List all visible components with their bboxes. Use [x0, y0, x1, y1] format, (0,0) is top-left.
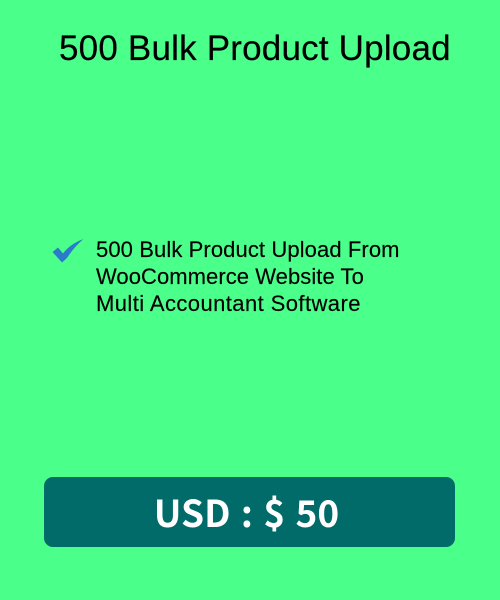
title: 500 Bulk Product Upload — [59, 29, 451, 68]
icon: check mark — [52, 239, 84, 262]
price bar: USD : $ 50 — [154, 484, 339, 538]
feature description: Multi Accountant Software — [96, 291, 361, 316]
feature description — [96, 237, 400, 316]
feature description: WooCommerce Website To — [96, 264, 364, 289]
price bar — [44, 477, 455, 547]
feature description: 500 Bulk Product Upload From — [96, 237, 400, 262]
